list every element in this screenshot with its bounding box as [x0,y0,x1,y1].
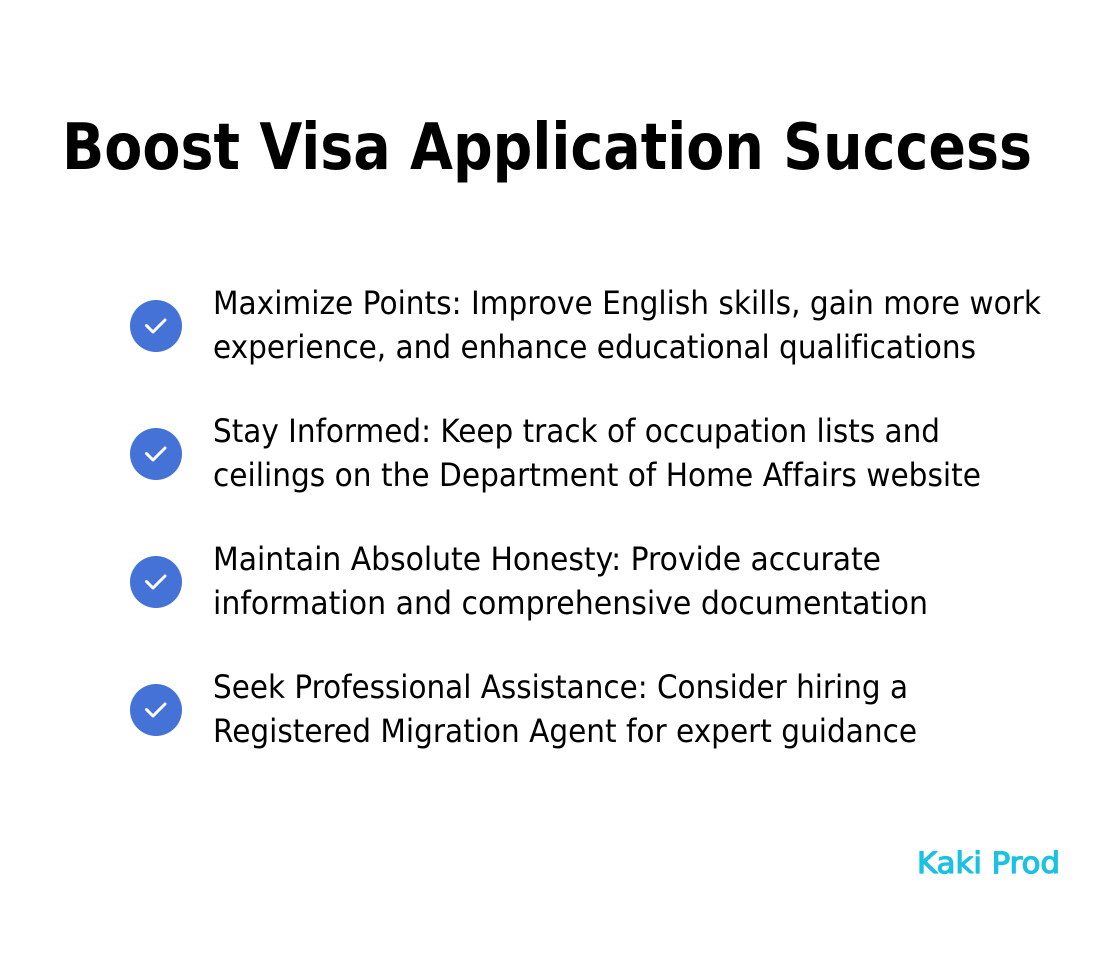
text: stay informed [213,412,981,494]
icon: check [130,684,182,736]
text: maximize points: experience, and enhance educational qualifications [213,328,976,366]
text: professional assistance: Registered Migration Agent for expert guidance [213,712,917,750]
item: maximize points [130,284,1041,366]
item: maintain honesty [130,540,928,622]
text: maximize points [213,284,1041,366]
text: professional assistance: Seek Professional Assistance: Consider hiring a [213,668,908,706]
icon: check [130,556,182,608]
text: professional assistance [213,668,917,750]
text: stay informed: ceilings on the Department of Home Affairs website [213,456,981,494]
text: stay informed: Stay Informed: Keep track of occupation lists and [213,412,940,450]
text: maintain honesty: Maintain Absolute Honesty: Provide accurate [213,540,881,578]
icon: check [130,300,182,352]
logo: Kaki Prod: Kaki Prod [917,846,1060,880]
checklist [130,284,1041,750]
text: maintain honesty: information and comprehensive documentation [213,584,928,622]
item: professional assistance [130,668,917,750]
text: maintain honesty [213,540,928,622]
item: stay informed [130,412,981,494]
text: maximize points: Maximize Points: Improve English skills, gain more work [213,284,1041,322]
icon: check [130,428,182,480]
